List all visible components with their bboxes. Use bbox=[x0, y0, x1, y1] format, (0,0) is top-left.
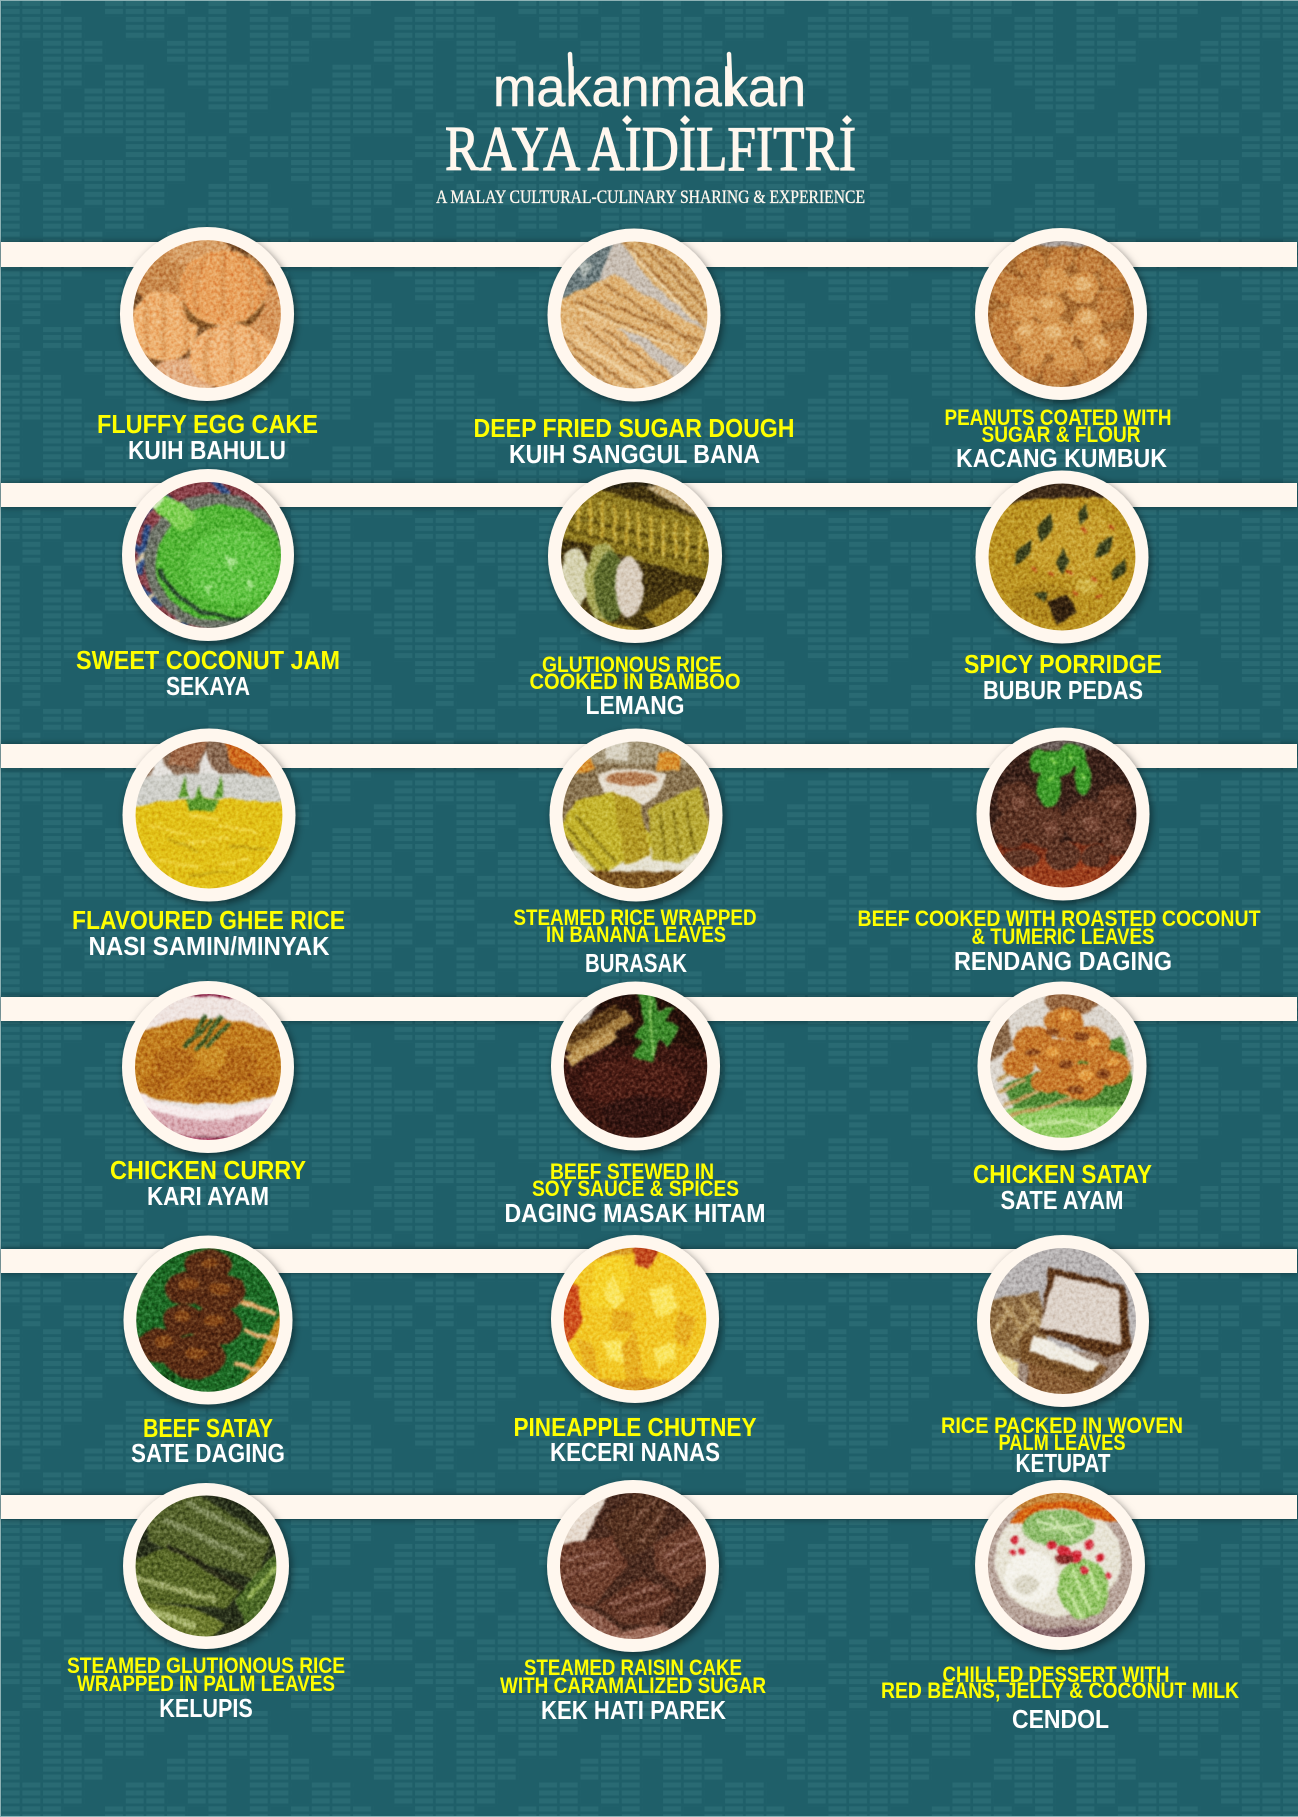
panel: Sate Ayam bbox=[973, 978, 1152, 1215]
panel: Kek Hati Parek bbox=[500, 1476, 766, 1725]
photo: daging masak hitam bbox=[547, 978, 724, 1154]
label: Kuih Sanggul Bana bbox=[474, 413, 794, 469]
panel: Daging Masak Hitam bbox=[504, 978, 766, 1228]
label: Bubur Pedas: SPICY PORRIDGE bbox=[964, 649, 1162, 679]
label: Kelupis: KELUPIS bbox=[159, 1693, 253, 1723]
label: Ketupat: PALM LEAVES bbox=[998, 1430, 1126, 1455]
photo: rendang daging bbox=[972, 723, 1154, 905]
panel: Kuih Sanggul Bana bbox=[474, 224, 794, 469]
label: Daging Masak Hitam bbox=[504, 1159, 766, 1228]
label: Rendang Daging: RENDANG DAGING bbox=[954, 946, 1172, 976]
label: Keceri Nanas: PINEAPPLE CHUTNEY bbox=[514, 1412, 756, 1442]
panel: Cendol bbox=[881, 1476, 1239, 1734]
photo: lemang bbox=[544, 465, 726, 647]
photo: cendol bbox=[971, 1476, 1149, 1654]
label: Sate Ayam bbox=[973, 1159, 1152, 1215]
title: makanmakan: makanmakan bbox=[493, 56, 806, 118]
photo: burasak bbox=[545, 724, 727, 906]
label: Burasak bbox=[514, 905, 756, 978]
label: Sekaya: SEKAYA bbox=[166, 671, 250, 701]
photo: kari ayam bbox=[118, 977, 298, 1157]
label: Kari Ayam bbox=[110, 1155, 306, 1211]
panel: Kacang Kumbuk bbox=[944, 224, 1172, 473]
label: Sate Ayam: CHICKEN SATAY bbox=[973, 1159, 1152, 1189]
label: Kuih Bahulu bbox=[97, 409, 318, 465]
label: Cendol: CENDOL bbox=[1012, 1704, 1109, 1734]
label: Sate Daging: SATE DAGING bbox=[131, 1438, 285, 1468]
label: Bubur Pedas: BUBUR PEDAS bbox=[983, 675, 1143, 705]
photo: bubur pedas bbox=[971, 466, 1153, 648]
label: Sate Daging: BEEF SATAY bbox=[143, 1413, 273, 1443]
label: Kacang Kumbuk bbox=[944, 405, 1172, 473]
label: Kuih Sanggul Bana: KUIH SANGGUL BANA bbox=[509, 439, 760, 469]
label: Daging Masak Hitam: DAGING MASAK HITAM bbox=[504, 1198, 766, 1228]
label: Kek Hati Parek: STEAMED RAISIN CAKE bbox=[524, 1655, 742, 1680]
label: Ketupat: RICE PACKED IN WOVEN bbox=[941, 1413, 1183, 1438]
label: Kek Hati Parek: KEK HATI PAREK bbox=[541, 1695, 726, 1725]
label: Cendol: CHILLED DESSERT WITH bbox=[942, 1662, 1170, 1687]
label: Kek Hati Parek bbox=[500, 1655, 766, 1725]
label: Kelupis bbox=[67, 1653, 345, 1723]
label: Lemang: COOKED IN BAMBOO bbox=[530, 669, 740, 694]
label: Lemang: LEMANG bbox=[586, 690, 684, 720]
label: Kuih Bahulu: FLUFFY EGG CAKE bbox=[97, 409, 318, 439]
photo: kuih bahulu bbox=[116, 223, 298, 405]
label: Kari Ayam: KARI AYAM bbox=[147, 1181, 269, 1211]
label: Burasak: IN BANANA LEAVES bbox=[546, 922, 726, 947]
photo: kek hati parek bbox=[543, 1476, 723, 1656]
label: Kelupis: STEAMED GLUTIONOUS RICE bbox=[67, 1653, 345, 1678]
panel: Kelupis bbox=[67, 1479, 345, 1723]
label: Bubur Pedas bbox=[964, 649, 1162, 705]
photo: kacang kumbuk bbox=[971, 224, 1151, 404]
cream bands bbox=[1, 242, 1297, 1519]
label: Rendang Daging bbox=[858, 906, 1261, 976]
title: Raya Aidilfitri: RAYA AIDILFITRI bbox=[445, 113, 856, 184]
label: Kuih Bahulu: KUIH BAHULU bbox=[128, 435, 286, 465]
panel: Rendang Daging bbox=[858, 723, 1261, 976]
label: Sekaya bbox=[76, 645, 340, 701]
label: Sate Ayam: SATE AYAM bbox=[1000, 1185, 1124, 1215]
label: Kelupis: WRAPPED IN PALM LEAVES bbox=[77, 1671, 335, 1696]
photo: keceri nanas bbox=[547, 1231, 723, 1407]
label: Daging Masak Hitam: SOY SAUCE & SPICES bbox=[532, 1176, 739, 1201]
subtitle: A MALAY CULTURAL-CULINARY SHARING & EXPERIENCE bbox=[436, 187, 865, 208]
label: Kek Hati Parek: WITH CARAMALIZED SUGAR bbox=[500, 1673, 766, 1698]
panel: Sekaya bbox=[76, 465, 340, 701]
panel: Nasi Samin bbox=[72, 724, 345, 961]
panel: Bubur Pedas bbox=[964, 466, 1162, 705]
label: Kuih Sanggul Bana: DEEP FRIED SUGAR DOUGH bbox=[474, 413, 794, 443]
photo: sate daging bbox=[120, 1232, 296, 1408]
label: Kacang Kumbuk: PEANUTS COATED WITH bbox=[944, 405, 1172, 430]
panel: Burasak bbox=[514, 724, 756, 978]
photo: nasi samin bbox=[118, 724, 300, 906]
label: Keceri Nanas: KECERI NANAS bbox=[550, 1437, 720, 1467]
label: Kacang Kumbuk: SUGAR & FLOUR bbox=[982, 422, 1141, 447]
label: Cendol: RED BEANS, JELLY & COCONUT MILK bbox=[881, 1678, 1239, 1703]
photo: ketupat bbox=[973, 1231, 1153, 1411]
label: Lemang bbox=[530, 652, 740, 720]
label: Sate Daging bbox=[131, 1413, 285, 1468]
photo: sekaya bbox=[118, 465, 298, 645]
panel: Sate Daging bbox=[120, 1232, 296, 1468]
label: Burasak: BURASAK bbox=[585, 948, 687, 978]
label: Sekaya: SWEET COCONUT JAM bbox=[76, 645, 340, 675]
label: Nasi Samin: FLAVOURED GHEE RICE bbox=[72, 905, 345, 935]
panel: Kari Ayam bbox=[110, 977, 306, 1211]
panel: Keceri Nanas bbox=[514, 1231, 756, 1467]
panel: Kuih Bahulu bbox=[97, 223, 318, 465]
label: Rendang Daging: & TUMERIC LEAVES bbox=[972, 924, 1154, 949]
label: Lemang: GLUTIONOUS RICE bbox=[542, 652, 722, 677]
photo: sate ayam bbox=[974, 978, 1150, 1154]
label: Burasak: STEAMED RICE WRAPPED bbox=[514, 905, 756, 930]
label: Nasi Samin: NASI SAMIN/MINYAK bbox=[88, 931, 330, 961]
label: Cendol bbox=[881, 1662, 1239, 1734]
photo: kelupis bbox=[119, 1479, 293, 1653]
label: Kari Ayam: CHICKEN CURRY bbox=[110, 1155, 306, 1185]
photo: kuih sanggul bana bbox=[543, 224, 725, 406]
label: Nasi Samin bbox=[72, 905, 345, 961]
label: Ketupat: KETUPAT bbox=[1016, 1448, 1111, 1478]
label: Ketupat bbox=[941, 1413, 1183, 1478]
label: Keceri Nanas bbox=[514, 1412, 756, 1467]
title block bbox=[436, 54, 865, 208]
label: Kacang Kumbuk: KACANG KUMBUK bbox=[956, 443, 1167, 473]
label: Daging Masak Hitam: BEEF STEWED IN bbox=[550, 1159, 714, 1184]
panel: Lemang bbox=[530, 465, 740, 720]
panel: Ketupat bbox=[941, 1231, 1183, 1478]
